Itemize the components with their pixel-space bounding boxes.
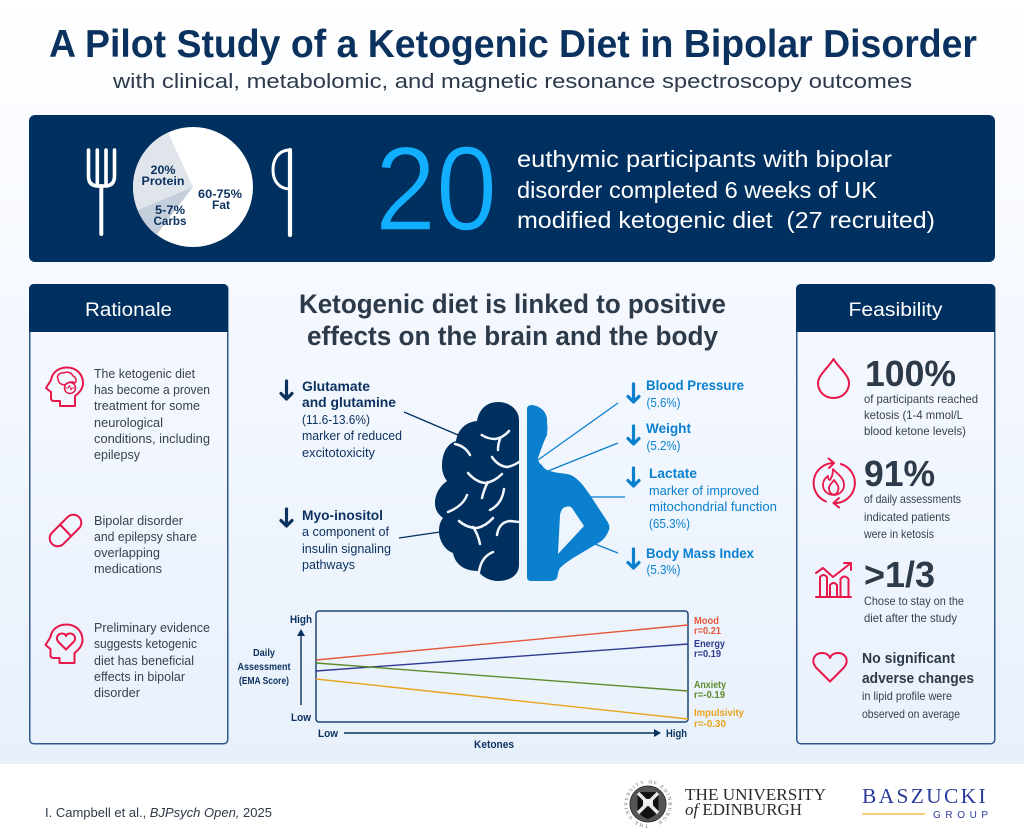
text: preliminary evidence: disorder xyxy=(94,685,141,700)
banner text: modified ketogenic diet (27 recruited) xyxy=(517,207,935,233)
series: energy xyxy=(316,644,688,671)
chart: macronutrient pie: Carbs xyxy=(154,214,187,228)
text: preliminary evidence: diet has beneficial xyxy=(94,653,194,668)
text: overlapping medications: Bipolar disorder xyxy=(94,513,184,528)
heading: rationale: Rationale xyxy=(85,300,172,321)
callout: lactate: marker of improved xyxy=(649,483,759,498)
text: proven treatment: epilepsy xyxy=(94,447,140,462)
legend labels: r=0.21 xyxy=(694,625,721,637)
callout: myo-inositol: a component of xyxy=(302,524,389,539)
text: overlapping medications xyxy=(94,513,197,576)
icon: rising chart xyxy=(816,563,851,597)
text: preliminary evidence: effects in bipolar xyxy=(94,669,186,684)
callout: myo-inositol: pathways xyxy=(302,557,355,572)
legend labels: r=-0.19 xyxy=(694,689,725,701)
stat: more than one third: >1/3 xyxy=(864,554,935,595)
icon: cycling flame xyxy=(814,458,855,508)
callout: body mass index: Body Mass Index xyxy=(646,545,754,561)
callout lines: brain xyxy=(399,412,458,538)
callout: myo-inositol xyxy=(281,507,391,572)
callout: blood pressure: (5.6%) xyxy=(646,395,680,410)
icon: heart xyxy=(813,653,847,682)
callout: glutamate and glutamine: marker of reduced xyxy=(302,428,402,443)
callout: body mass index xyxy=(628,545,754,577)
icon: fork xyxy=(88,150,114,234)
heading: centre: Ketogenic diet is linked to positive xyxy=(299,289,726,319)
chart: macronutrient pie xyxy=(133,127,253,247)
panel: rationale xyxy=(29,284,228,744)
stat: no adverse changes xyxy=(862,650,974,721)
callout: lactate: (65.3%) xyxy=(649,516,690,531)
line chart: EMA score vs ketones xyxy=(238,611,744,751)
subtitle: with clinical, metabolomic, and magnetic resonance spectroscopy outcomes xyxy=(112,70,912,93)
stat: 91%: indicated patients xyxy=(864,510,950,524)
callout: lactate: Lactate xyxy=(649,465,697,481)
stat: no adverse changes: No significant xyxy=(862,650,955,667)
y axis: High xyxy=(290,614,312,626)
callout: weight: Weight xyxy=(646,420,691,436)
x axis: Low xyxy=(318,728,338,740)
logo: University of Edinburgh: THE UNIVERSITY xyxy=(685,785,826,804)
stat: 91% xyxy=(863,453,961,541)
stat: no adverse changes: adverse changes xyxy=(862,670,974,687)
icon: knife xyxy=(273,150,290,235)
title: A Pilot Study of a Ketogenic Diet in Bipolar Disorder xyxy=(49,23,977,66)
text: proven treatment: conditions, including xyxy=(94,431,210,446)
callout: glutamate and glutamine: (11.6-13.6%) xyxy=(302,412,370,427)
stat: 91%: 91% xyxy=(864,453,935,494)
stat: no adverse changes: observed on average xyxy=(862,707,960,721)
stat: 91%: were in ketosis xyxy=(863,527,934,541)
chart: macronutrient pie: Protein xyxy=(142,174,184,188)
stat: more than one third: Chose to stay on the xyxy=(864,594,964,608)
callout: weight: (5.2%) xyxy=(646,438,680,453)
text: proven treatment: has become a proven xyxy=(94,382,210,397)
stat: 100% xyxy=(864,353,978,438)
series: anxiety xyxy=(316,663,688,691)
icon: blood drop xyxy=(818,359,849,398)
stat: more than one third: diet after the study xyxy=(864,611,957,625)
callout: blood pressure: Blood Pressure xyxy=(646,377,744,393)
chart: macronutrient pie: 5-7% xyxy=(155,203,185,217)
text: proven treatment: The ketogenic diet xyxy=(94,366,195,381)
x axis xyxy=(318,728,687,751)
logo: Baszucki Group xyxy=(862,784,993,821)
logo: University of Edinburgh: of EDINBURGH xyxy=(685,800,802,819)
banner text xyxy=(517,146,935,233)
body illustration xyxy=(527,405,609,581)
callout: body mass index: (5.3%) xyxy=(646,562,680,577)
callout: glutamate and glutamine: excitotoxicity xyxy=(302,445,375,460)
callout: glutamate and glutamine: Glutamate xyxy=(302,378,370,394)
icon: pill xyxy=(46,511,85,550)
chart: macronutrient pie: Fat xyxy=(212,198,230,212)
chart: macronutrient pie: 20% xyxy=(150,163,176,177)
legend labels: Mood xyxy=(694,615,719,627)
text: preliminary evidence: suggests ketogenic xyxy=(94,636,197,651)
logo: University of Edinburgh: THE UNIVERSITY OF EDINBURGH xyxy=(624,780,672,828)
callout: myo-inositol: Myo-inositol xyxy=(302,507,383,523)
y axis xyxy=(238,614,312,724)
callout: lactate xyxy=(628,465,777,531)
stat: 100%: 100% xyxy=(865,353,956,394)
legend labels: r=-0.30 xyxy=(694,718,726,730)
series: impulsivity xyxy=(316,679,688,719)
brain illustration xyxy=(435,402,519,581)
text: proven treatment xyxy=(94,366,210,462)
text: overlapping medications: overlapping xyxy=(94,545,160,560)
y axis: Assessment xyxy=(238,661,291,673)
stat: 100%: blood ketone levels) xyxy=(864,424,966,438)
stat: 100%: ketosis (1-4 mmol/L xyxy=(864,408,963,422)
stat: more than one third xyxy=(864,554,964,625)
text: preliminary evidence xyxy=(94,620,210,700)
panel: participants banner xyxy=(29,115,995,262)
text: proven treatment: treatment for some xyxy=(94,398,200,413)
logo: Baszucki Group: BASZUCKI xyxy=(862,784,988,808)
logo: University of Edinburgh xyxy=(624,780,826,828)
logo: Baszucki Group: GROUP xyxy=(933,810,993,821)
stat: 91%: of daily assessments xyxy=(864,492,961,506)
stat: no adverse changes: in lipid profile were xyxy=(862,689,952,703)
text: overlapping medications: and epilepsy share xyxy=(94,529,197,544)
text: overlapping medications: medications xyxy=(94,561,162,576)
text: preliminary evidence: Preliminary evidence xyxy=(94,620,210,635)
heading: centre xyxy=(299,289,726,351)
legend labels xyxy=(694,615,744,730)
legend labels: Anxiety xyxy=(694,679,726,691)
stat: 100%: of participants reached xyxy=(864,392,978,406)
callout: glutamate and glutamine xyxy=(281,378,402,460)
legend labels: r=0.19 xyxy=(694,648,721,660)
y axis: (EMA Score) xyxy=(239,675,289,687)
callout lines: body xyxy=(538,403,625,553)
big number 20: 20 xyxy=(375,122,497,256)
panel: feasibility xyxy=(796,284,995,744)
x axis: Ketones xyxy=(474,739,514,751)
icon: head with heart xyxy=(46,624,82,663)
icon: head with brain xyxy=(46,368,83,406)
chart: macronutrient pie: 60-75% xyxy=(198,187,242,201)
heading: feasibility: Feasibility xyxy=(848,300,943,321)
banner text: disorder completed 6 weeks of UK xyxy=(517,177,878,203)
citation: I. Campbell et al., BJPsych Open, 2025 xyxy=(45,805,272,820)
callout: blood pressure xyxy=(628,377,744,410)
y axis: Low xyxy=(291,712,311,724)
callout: lactate: mitochondrial function xyxy=(649,499,777,514)
series: mood xyxy=(316,625,688,660)
legend labels: Energy xyxy=(694,638,725,650)
callout: weight xyxy=(628,420,691,453)
x axis: High xyxy=(666,728,687,740)
y axis: Daily xyxy=(253,647,275,659)
legend labels: Impulsivity xyxy=(694,707,744,719)
banner text: euthymic participants with bipolar xyxy=(517,146,892,172)
text: proven treatment: neurological xyxy=(94,415,163,430)
callout: myo-inositol: insulin signaling xyxy=(302,541,391,556)
heading: centre: effects on the brain and the body xyxy=(307,321,718,351)
callout: glutamate and glutamine: and glutamine xyxy=(302,394,396,410)
